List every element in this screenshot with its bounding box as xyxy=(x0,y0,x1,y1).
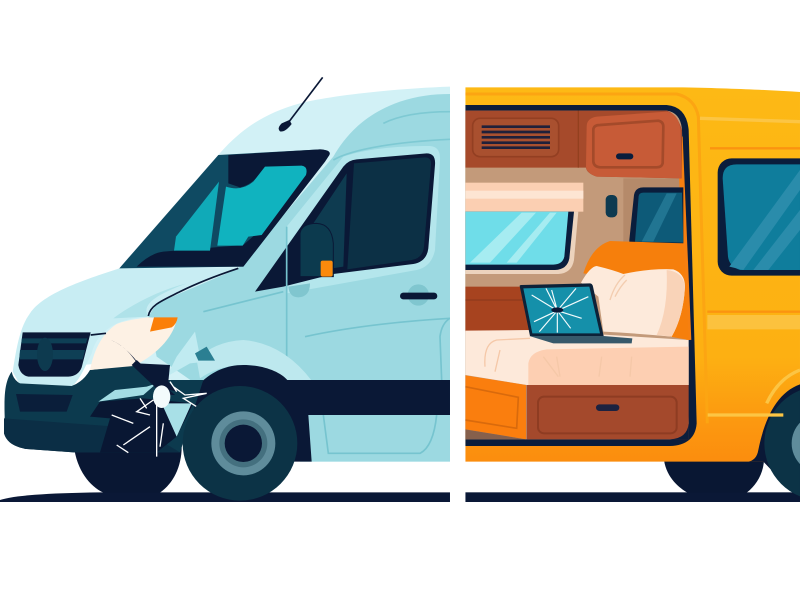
hood edge line xyxy=(148,268,238,316)
door seams xyxy=(203,227,450,453)
side window xyxy=(718,158,800,276)
wheel arch highlight xyxy=(197,340,312,381)
cabinet door xyxy=(578,111,682,178)
rear-hidden front tyre xyxy=(74,447,182,493)
body highlights xyxy=(465,94,707,423)
side window xyxy=(255,153,435,292)
orange bed base xyxy=(465,375,526,439)
door opening interior base xyxy=(465,105,697,446)
navy side stripe and wheel arch xyxy=(180,365,450,462)
far wheel xyxy=(748,383,800,503)
illustration: damaged van and camper van interior xyxy=(0,76,800,502)
side window frame xyxy=(287,146,440,293)
van window xyxy=(465,212,578,274)
panel: damaged van front xyxy=(0,77,450,502)
antenna xyxy=(279,77,323,132)
hood xyxy=(13,268,238,387)
window glass xyxy=(314,174,346,268)
yellow van body xyxy=(465,87,800,462)
rear window xyxy=(629,187,683,243)
body side panel xyxy=(148,94,450,462)
laptop xyxy=(520,283,632,343)
front wheel xyxy=(183,386,297,501)
hood crease xyxy=(113,283,187,318)
ground line xyxy=(0,492,450,502)
crash damage xyxy=(90,332,215,457)
windshield xyxy=(119,149,330,268)
roof vent xyxy=(473,118,559,157)
panel: open van interior xyxy=(465,87,800,503)
grille xyxy=(18,332,91,377)
bumper xyxy=(4,365,203,452)
roof crease lines xyxy=(333,112,450,160)
side mirror xyxy=(288,223,333,297)
ground line xyxy=(465,492,800,502)
door handle xyxy=(400,284,437,306)
interior wall xyxy=(465,111,689,439)
pillow xyxy=(581,266,685,337)
bumper lower lip xyxy=(4,418,180,452)
headrest cushion xyxy=(583,241,689,340)
rear tyre xyxy=(664,460,764,493)
drawer xyxy=(527,385,689,439)
headlight xyxy=(90,317,178,370)
lower wall panel xyxy=(465,287,532,332)
van body xyxy=(86,86,450,462)
mattress xyxy=(465,330,689,385)
right wall section xyxy=(623,178,683,243)
upper cabinets xyxy=(465,111,682,178)
interior edge trim xyxy=(680,137,689,340)
bumper vent xyxy=(16,394,73,412)
wall switch xyxy=(606,195,617,217)
screen cracks xyxy=(532,288,588,333)
roller blind xyxy=(465,183,583,212)
